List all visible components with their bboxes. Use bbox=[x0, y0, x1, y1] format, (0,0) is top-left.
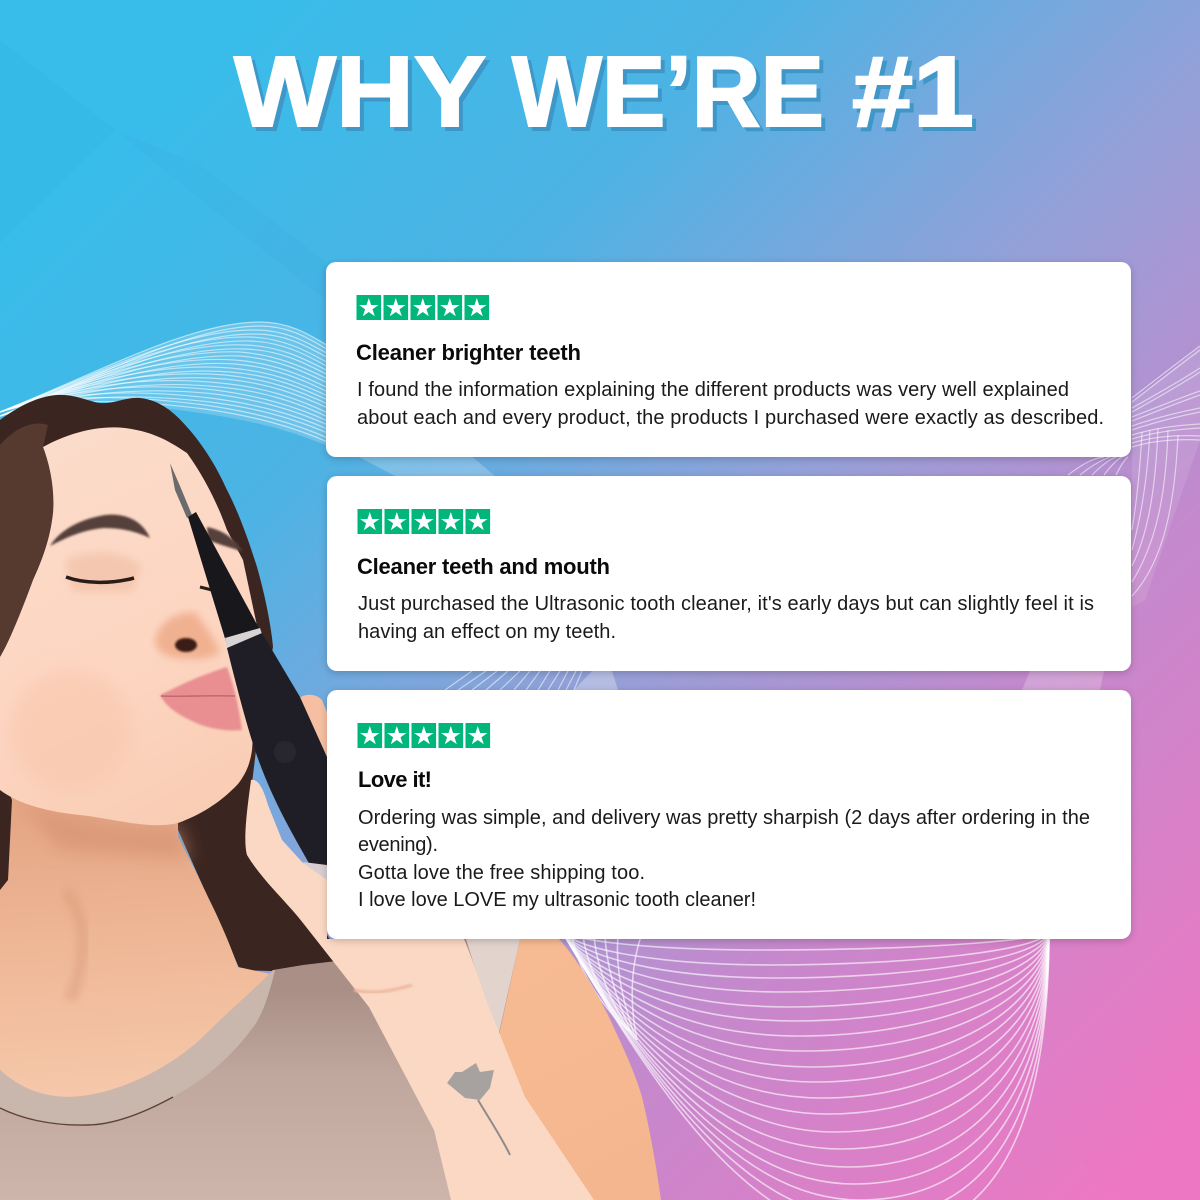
review 1 body bbox=[357, 379, 1104, 429]
star rating 3 bbox=[358, 723, 490, 748]
closed eye bbox=[66, 577, 134, 582]
wave ribbon: right side bbox=[445, 346, 1200, 690]
silver collar bbox=[225, 628, 262, 650]
shirt bbox=[0, 939, 570, 1200]
review card 1 bbox=[326, 262, 1131, 457]
shoulder bbox=[470, 939, 661, 1200]
second eye lash bbox=[200, 587, 212, 590]
needle tip bbox=[170, 463, 192, 518]
review 3 body: Gotta love the free shipping too. bbox=[358, 862, 645, 884]
shirt neckband bbox=[0, 970, 275, 1125]
review 1 heading: Cleaner brighter teeth bbox=[356, 340, 581, 365]
nostril bbox=[175, 638, 197, 652]
review card 3 bbox=[327, 690, 1131, 939]
woman holding ultrasonic tooth cleaner bbox=[0, 395, 661, 1200]
lips bbox=[160, 667, 242, 731]
star rating 2 bbox=[358, 509, 490, 534]
wave ribbon: upper left bbox=[0, 322, 495, 476]
face bbox=[0, 427, 260, 825]
power button bbox=[274, 741, 296, 763]
review 3 body: I love love LOVE my ultrasonic tooth cleaner! bbox=[358, 889, 756, 911]
star rating 1 bbox=[356, 295, 489, 320]
review 1 body: I found the information explaining the different products was very well explained bbox=[357, 379, 1069, 401]
title bbox=[234, 36, 974, 148]
device shaft bbox=[188, 512, 260, 645]
neck and chest bbox=[0, 780, 275, 1125]
back hair bbox=[0, 395, 350, 975]
strap bbox=[466, 939, 520, 1037]
hand shade crease bbox=[354, 985, 412, 992]
review 3 body: evening). bbox=[358, 834, 438, 856]
wave ribbon: bottom centre bbox=[561, 930, 1049, 1200]
review 3 body bbox=[358, 807, 1090, 911]
lip line bbox=[161, 695, 235, 697]
title: WHY bbox=[234, 36, 486, 148]
review 2 body bbox=[358, 593, 1094, 643]
left hair tips bbox=[0, 770, 12, 890]
title: WE’RE bbox=[512, 36, 824, 148]
under-jaw shadow bbox=[20, 800, 190, 860]
review 1 body: about each and every product, the products I purchased were exactly as described. bbox=[357, 407, 1104, 429]
cheek tone bbox=[10, 670, 130, 790]
review card 2 bbox=[327, 476, 1131, 671]
shirt neckband shadow bbox=[0, 1097, 173, 1125]
nose shadow bbox=[155, 612, 220, 659]
finger behind device bbox=[290, 695, 330, 775]
forearm and hand bbox=[245, 780, 594, 1200]
review 2 body: having an effect on my teeth. bbox=[358, 621, 616, 643]
hair highlight strands bbox=[0, 424, 55, 657]
neck shadow line bbox=[65, 890, 83, 1000]
device base bbox=[303, 862, 327, 884]
review 3 body: Ordering was simple, and delivery was pretty sharpish (2 days after ordering in the bbox=[358, 807, 1090, 829]
tooth cleaner device bbox=[170, 463, 327, 884]
eyelid shading bbox=[65, 552, 142, 592]
device handle bbox=[227, 633, 327, 865]
eyebrow right bbox=[207, 527, 243, 552]
review 3 heading: Love it! bbox=[358, 767, 432, 792]
title: #1 bbox=[852, 36, 974, 148]
review 2 heading: Cleaner teeth and mouth bbox=[357, 554, 610, 579]
review 2 body: Just purchased the Ultrasonic tooth cleaner, it's early days but can slightly feel it is bbox=[358, 593, 1094, 615]
eyebrow left bbox=[50, 515, 150, 546]
tattoo bbox=[447, 1063, 510, 1155]
